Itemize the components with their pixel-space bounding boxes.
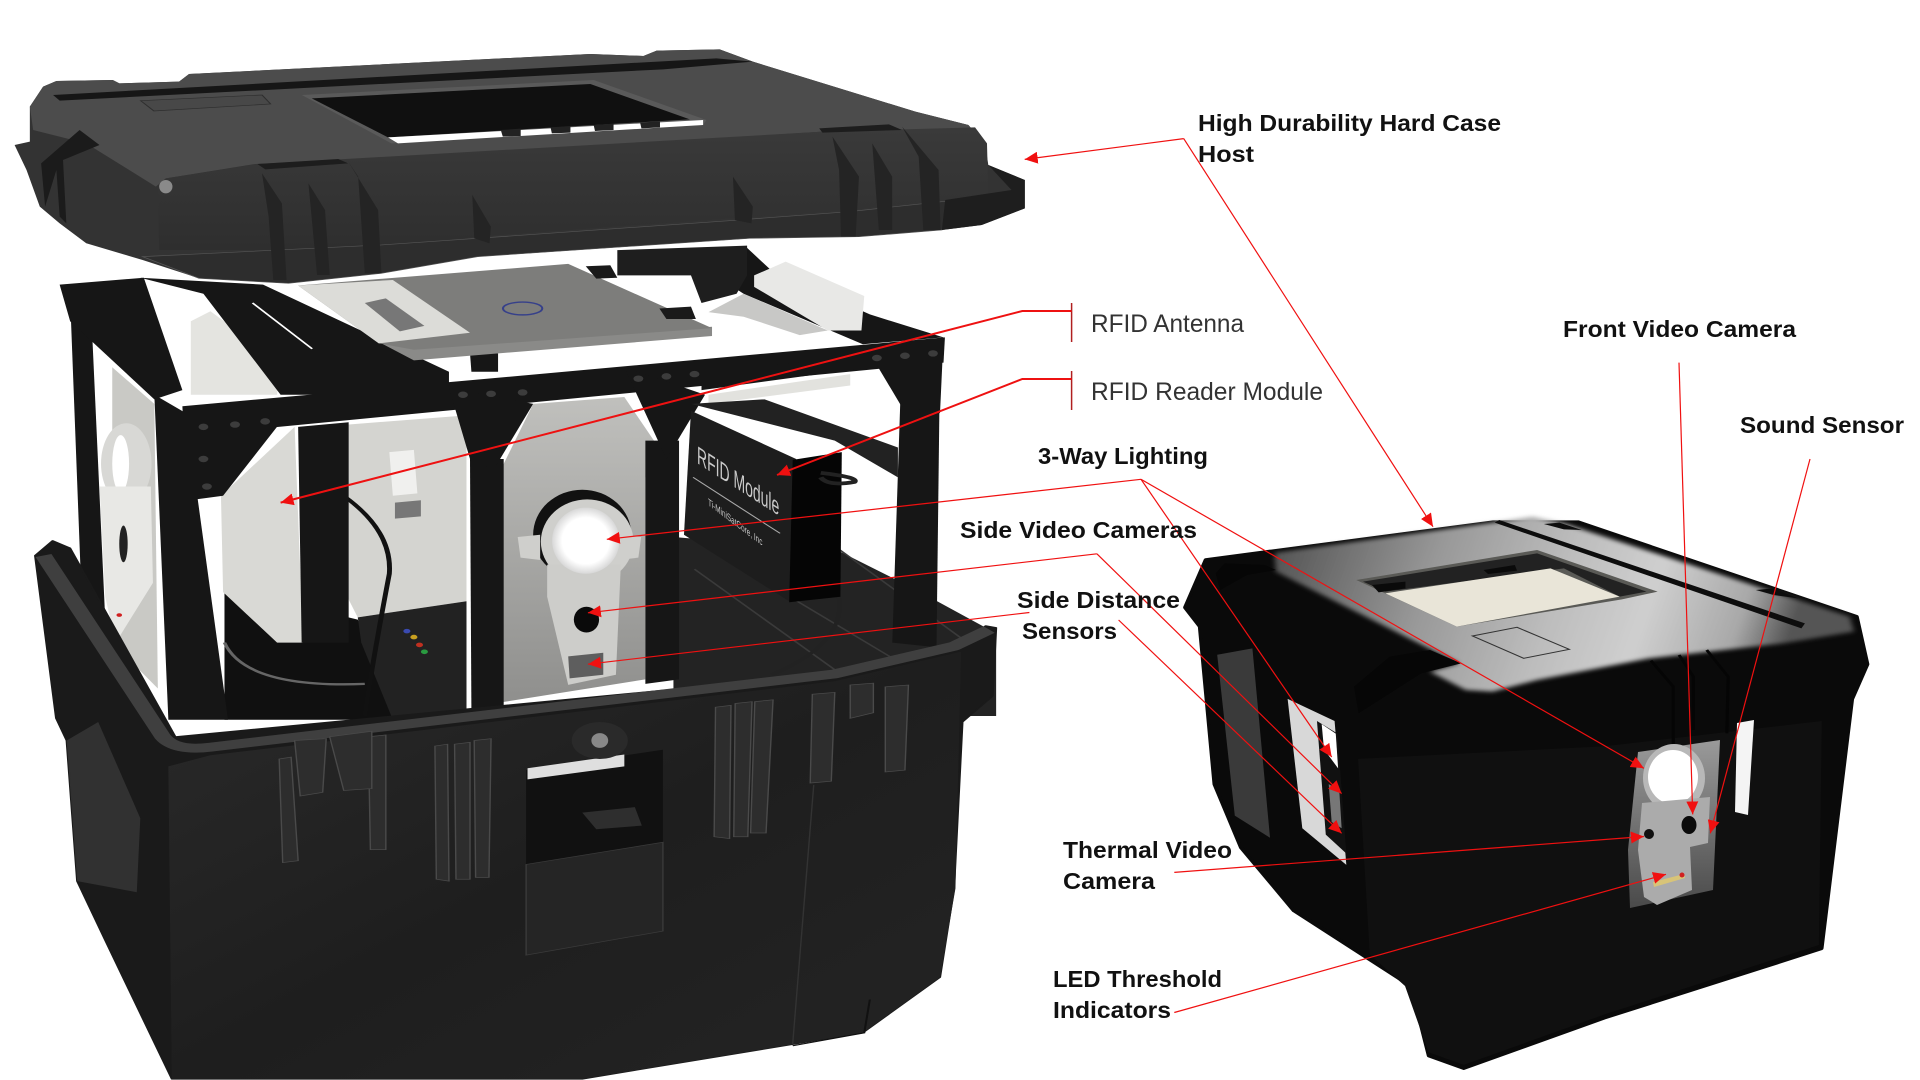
callout: high durability hard case host: Host [1198, 141, 1254, 167]
side flap [1217, 648, 1270, 838]
latch ribs [279, 683, 908, 881]
callout: front video camera: Front Video Camera [1563, 316, 1796, 342]
callout: side distance sensors: Side Distance [1017, 587, 1180, 613]
lower case body [35, 541, 996, 1079]
callout: high durability hard case host [1025, 110, 1501, 527]
callout: side distance sensors [588, 587, 1342, 833]
callout: 3-way lighting: 3-Way Lighting [1038, 443, 1208, 469]
front ribs [1651, 650, 1728, 753]
white back block [754, 262, 864, 330]
callout: LED threshold indicators [1053, 874, 1666, 1023]
callout: thermal video camera [1063, 836, 1644, 894]
white interior module boxes [191, 311, 850, 643]
front sensor window [1628, 740, 1720, 908]
callout: high durability hard case host: High Durability Hard Case [1198, 110, 1501, 136]
lid skirt [143, 197, 988, 283]
callout: side video cameras [588, 517, 1342, 794]
emboss label [141, 95, 271, 111]
callout: front video camera [1563, 316, 1796, 814]
control box [358, 601, 466, 720]
RFID module print: RFID Module [697, 441, 779, 522]
central gray panel [502, 397, 666, 702]
callout: sound sensor [1710, 412, 1904, 833]
lid [15, 49, 1025, 283]
callout: sound sensor: Sound Sensor [1740, 412, 1904, 438]
RFID antenna plate [298, 264, 712, 360]
top face [1275, 517, 1854, 692]
side window [1288, 699, 1346, 865]
callout: RFID reader module: RFID Reader Module [1091, 378, 1323, 406]
lid clamps and ribs [41, 124, 1025, 280]
callout: LED threshold indicators: LED Threshold [1053, 966, 1222, 992]
RFID module box [684, 411, 855, 602]
illustration: open hard case with internal frame [15, 49, 1025, 1079]
front hatch window [526, 722, 663, 955]
callout: thermal video camera: Camera [1063, 868, 1155, 894]
emboss outline [1472, 627, 1569, 658]
interior floor [224, 537, 996, 720]
callout: RFID antenna [281, 303, 1244, 503]
RFID module print: Ti-MiniSatCore, Inc [708, 497, 762, 549]
callout: thermal video camera: Thermal Video [1063, 837, 1232, 863]
illustration: closed hard case [1185, 517, 1868, 1068]
frame: dark aluminium uprights and beams [60, 246, 945, 720]
main camera unit [518, 490, 641, 685]
callout: RFID antenna: RFID Antenna [1091, 310, 1244, 338]
side panel with camera [100, 367, 158, 689]
cables [224, 491, 840, 716]
RFID module print [697, 441, 779, 549]
corner clamps [1216, 563, 1461, 713]
callout: side distance sensors: Sensors [1022, 618, 1117, 644]
rear strap [53, 58, 753, 101]
right slot [1735, 720, 1754, 815]
rivets on frame [199, 350, 938, 490]
callout: RFID reader module [777, 371, 1323, 475]
tablet window [1356, 550, 1658, 627]
lid window [302, 80, 706, 143]
callout: LED threshold indicators: Indicators [1053, 997, 1171, 1023]
closed case body [1185, 522, 1868, 1068]
callout: side video cameras: Side Video Cameras [960, 517, 1197, 543]
callout: 3-way lighting [607, 443, 1644, 768]
top strap and tabs [1495, 520, 1805, 628]
